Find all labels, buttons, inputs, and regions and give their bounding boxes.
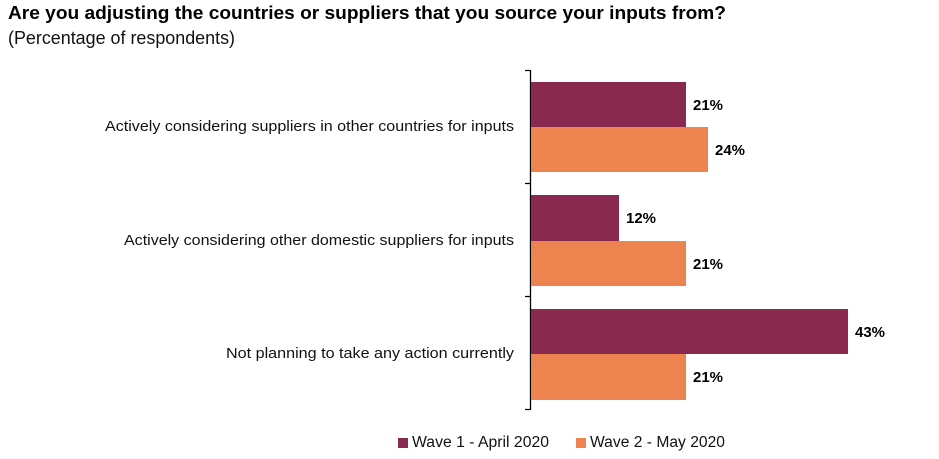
row: no action planned: 43% — [855, 324, 885, 341]
legend: wave 1: Wave 1 - April 2020 — [412, 434, 549, 451]
row: other domestic suppliers — [124, 195, 723, 286]
legend — [398, 434, 725, 451]
row: other domestic suppliers: 12% — [626, 210, 656, 227]
bar chart — [105, 70, 885, 410]
legend: wave 2: Wave 2 - May 2020 — [590, 434, 725, 451]
row: suppliers in other countries: 21% — [693, 97, 723, 114]
subtitle: (Percentage of respondents) — [8, 27, 235, 48]
row: no action planned: Not planning to take any action currently — [226, 345, 515, 362]
title: Are you adjusting the countries or suppliers that you source your inputs from? — [8, 2, 726, 23]
row: suppliers in other countries: 24% — [715, 142, 745, 159]
row: no action planned — [226, 309, 885, 400]
row: suppliers in other countries: Actively considering suppliers in other countries for inputs — [105, 118, 514, 135]
row: suppliers in other countries — [105, 82, 745, 172]
row: no action planned: 21% — [693, 369, 723, 386]
row: other domestic suppliers: Actively considering other domestic suppliers for inputs — [124, 232, 514, 249]
axis — [525, 70, 530, 410]
row: other domestic suppliers: 21% — [693, 256, 723, 273]
